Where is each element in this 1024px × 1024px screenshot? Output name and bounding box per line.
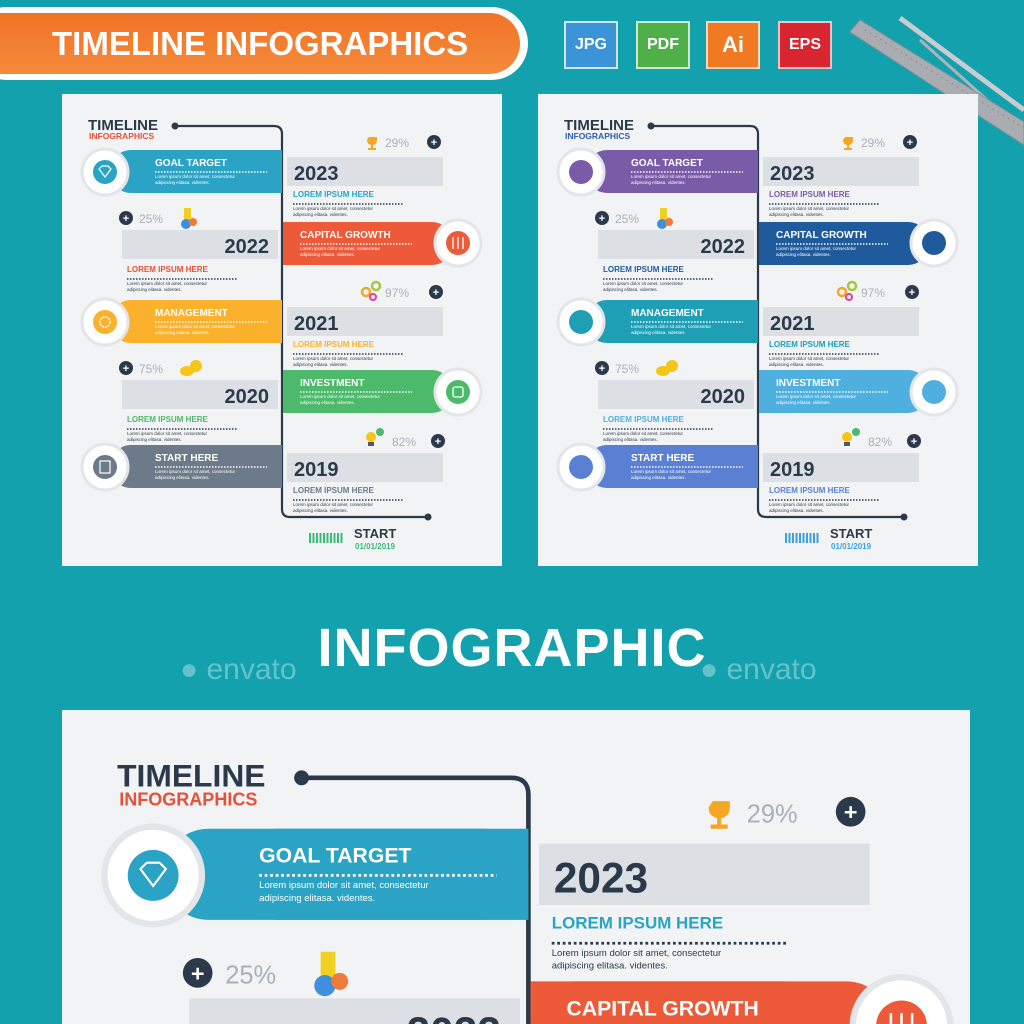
- band: investment: INVESTMENT: [300, 378, 364, 389]
- year 2020: [598, 380, 754, 442]
- year 2021: [287, 307, 443, 367]
- stat 25%: 25%: [139, 212, 163, 226]
- year 2023: 2023: [294, 163, 338, 185]
- stat 25%: 25%: [615, 212, 639, 226]
- year 2023: [287, 157, 443, 217]
- stat 97%: 97%: [861, 286, 885, 300]
- year 2023: adipiscing elitasa. videntes.: [293, 212, 348, 217]
- band: management: Lorem ipsum dolor sit amet, consectetur: [155, 324, 236, 329]
- year 2022: adipiscing elitasa. videntes.: [603, 287, 658, 292]
- band: capital growth: [531, 977, 950, 1024]
- year 2023: LOREM IPSUM HERE: [293, 190, 375, 199]
- icon: EPS: [778, 21, 832, 69]
- icon: JPG: JPG: [575, 36, 607, 53]
- year 2020: 2020: [700, 386, 745, 408]
- band: start here: adipiscing elitasa. videntes.: [155, 475, 210, 480]
- year 2019: adipiscing elitasa. videntes.: [769, 508, 824, 513]
- year 2022: LOREM IPSUM HERE: [127, 265, 209, 274]
- icon: PDF: PDF: [647, 36, 679, 53]
- stat 29%: [843, 135, 917, 150]
- stat 82%: [366, 428, 445, 449]
- year 2021: [763, 307, 919, 367]
- icon: ruler and compass: [849, 16, 1024, 146]
- stat 29%: 29%: [385, 136, 409, 150]
- year 2021: LOREM IPSUM HERE: [769, 340, 851, 349]
- year 2023: LOREM IPSUM HERE: [552, 913, 723, 932]
- stat 75%: +: [599, 363, 605, 375]
- card 2: [538, 94, 978, 566]
- band: start here: Lorem ipsum dolor sit amet, consectetur: [155, 469, 236, 474]
- band: start here: START HERE: [155, 453, 218, 464]
- year 2021: 2021: [770, 313, 814, 335]
- year 2022: Lorem ipsum dolor sit amet, consectetur: [603, 281, 684, 286]
- year 2020: adipiscing elitasa. videntes.: [603, 437, 658, 442]
- year 2020: adipiscing elitasa. videntes.: [127, 437, 182, 442]
- year 2020: LOREM IPSUM HERE: [127, 415, 209, 424]
- header title: TIMELINE INFOGRAPHICS: [52, 25, 468, 62]
- band: investment: [759, 369, 957, 415]
- year 2019: 2019: [770, 459, 814, 481]
- start label: 01/01/2019: [831, 542, 872, 551]
- title: INFOGRAPHIC: INFOGRAPHIC: [318, 618, 706, 678]
- stat 97%: [838, 282, 919, 300]
- band: capital growth: [283, 220, 481, 266]
- band: goal target: Lorem ipsum dolor sit amet, consectetur: [259, 880, 430, 891]
- band: goal target: adipiscing elitasa. videntes.: [259, 893, 375, 904]
- band: capital growth: [759, 220, 957, 266]
- heading: TIMELINE: TIMELINE: [117, 757, 266, 793]
- band: management: [82, 299, 282, 345]
- band: capital growth: CAPITAL GROWTH: [776, 230, 867, 241]
- year 2021: LOREM IPSUM HERE: [293, 340, 375, 349]
- start label: START: [830, 526, 872, 541]
- stat 82%: 82%: [868, 435, 892, 449]
- year 2019: 2019: [294, 459, 338, 481]
- year 2021: Lorem ipsum dolor sit amet, consectetur: [769, 356, 850, 361]
- year 2022: [189, 998, 520, 1024]
- year 2023: adipiscing elitasa. videntes.: [552, 961, 668, 972]
- year 2019: LOREM IPSUM HERE: [769, 486, 851, 495]
- band: capital growth: CAPITAL GROWTH: [300, 230, 391, 241]
- icon: JPG: [564, 21, 618, 69]
- year 2023: adipiscing elitasa. videntes.: [769, 212, 824, 217]
- heading: TIMELINE: INFOGRAPHICS: [119, 789, 257, 809]
- header pill: [0, 7, 528, 80]
- start label: 01/01/2019: [355, 542, 396, 551]
- stat 29%: +: [907, 137, 913, 149]
- icon: PDF: [636, 21, 690, 69]
- stat 75%: 75%: [615, 362, 639, 376]
- band: investment: adipiscing elitasa. videntes.: [776, 400, 831, 405]
- year 2023: 2023: [770, 163, 814, 185]
- year 2020: Lorem ipsum dolor sit amet, consectetur: [127, 431, 208, 436]
- band: goal target: adipiscing elitasa. videntes.: [631, 180, 686, 185]
- stat 25%: [119, 208, 197, 229]
- stat 25%: [183, 952, 348, 996]
- year 2021: adipiscing elitasa. videntes.: [769, 362, 824, 367]
- stat 75%: [595, 360, 678, 376]
- band: goal target: [104, 827, 528, 924]
- year 2023: [763, 157, 919, 217]
- year 2022: [122, 230, 278, 292]
- band: goal target: [558, 149, 758, 195]
- band: capital growth: adipiscing elitasa. videntes.: [300, 252, 355, 257]
- start label: [309, 526, 396, 551]
- year 2021: adipiscing elitasa. videntes.: [293, 362, 348, 367]
- year 2022: 2022: [700, 236, 745, 258]
- stat 29%: +: [844, 799, 857, 825]
- year 2023: Lorem ipsum dolor sit amet, consectetur: [769, 206, 850, 211]
- band: management: MANAGEMENT: [155, 308, 228, 319]
- year 2020: [122, 380, 278, 442]
- timeline line: [294, 770, 528, 1024]
- stat 29%: 29%: [861, 136, 885, 150]
- band: investment: INVESTMENT: [776, 378, 840, 389]
- stat 25%: [595, 208, 673, 229]
- icon: Ai: Ai: [722, 32, 744, 57]
- year 2023: 2023: [554, 854, 648, 901]
- band: investment: adipiscing elitasa. videntes.: [300, 400, 355, 405]
- start label: [785, 526, 872, 551]
- year 2022: Lorem ipsum dolor sit amet, consectetur: [127, 281, 208, 286]
- band: investment: Lorem ipsum dolor sit amet, consectetur: [300, 394, 381, 399]
- year 2019: LOREM IPSUM HERE: [293, 486, 375, 495]
- stat 25%: 25%: [225, 961, 276, 989]
- heading: TIMELINE: TIMELINE: [564, 117, 634, 134]
- band: start here: [558, 444, 758, 490]
- stat 97%: 97%: [385, 286, 409, 300]
- stat 82%: [842, 428, 921, 449]
- year 2021: 2021: [294, 313, 338, 335]
- stat 97%: [362, 282, 443, 300]
- stat 82%: +: [435, 436, 441, 448]
- band: management: [558, 299, 758, 345]
- band: goal target: GOAL TARGET: [155, 158, 227, 169]
- year 2020: Lorem ipsum dolor sit amet, consectetur: [603, 431, 684, 436]
- band: start here: Lorem ipsum dolor sit amet, consectetur: [631, 469, 712, 474]
- band: capital growth: Lorem ipsum dolor sit amet, consectetur: [300, 246, 381, 251]
- card 1: [62, 94, 502, 566]
- stat 75%: +: [123, 363, 129, 375]
- year 2019: Lorem ipsum dolor sit amet, consectetur: [769, 502, 850, 507]
- band: management: adipiscing elitasa. videntes.: [155, 330, 210, 335]
- stat 29%: +: [431, 137, 437, 149]
- stat 82%: +: [911, 436, 917, 448]
- year 2022: [598, 230, 754, 292]
- timeline line: [648, 122, 908, 520]
- band: capital growth: adipiscing elitasa. videntes.: [776, 252, 831, 257]
- band: management: adipiscing elitasa. videntes.: [631, 330, 686, 335]
- band: management: MANAGEMENT: [631, 308, 704, 319]
- stat 29%: [367, 135, 441, 150]
- year 2021: Lorem ipsum dolor sit amet, consectetur: [293, 356, 374, 361]
- band: start here: START HERE: [631, 453, 694, 464]
- format icons: [564, 21, 832, 69]
- band: goal target: GOAL TARGET: [259, 845, 411, 868]
- year 2019: Lorem ipsum dolor sit amet, consectetur: [293, 502, 374, 507]
- band: start here: [82, 444, 282, 490]
- year 2020: 2020: [224, 386, 269, 408]
- band: capital growth: Lorem ipsum dolor sit amet, consectetur: [776, 246, 857, 251]
- stat 25%: +: [599, 213, 605, 225]
- year 2023: Lorem ipsum dolor sit amet, consectetur: [293, 206, 374, 211]
- icon: Ai: [706, 21, 760, 69]
- stat 29%: [709, 797, 865, 829]
- watermarks: [180, 653, 817, 686]
- band: start here: adipiscing elitasa. videntes.: [631, 475, 686, 480]
- band: investment: [283, 369, 481, 415]
- heading: TIMELINE: INFOGRAPHICS: [565, 131, 630, 141]
- header title: [0, 13, 520, 74]
- stat 29%: 29%: [747, 800, 798, 828]
- heading: TIMELINE: INFOGRAPHICS: [89, 131, 154, 141]
- stat 25%: +: [191, 960, 204, 986]
- watermarks: ● envato: [700, 653, 817, 686]
- band: goal target: [82, 149, 282, 195]
- stat 75%: [119, 360, 202, 376]
- panel: large card detail: [62, 710, 970, 1024]
- year 2020: LOREM IPSUM HERE: [603, 415, 685, 424]
- heading: TIMELINE: [117, 757, 266, 809]
- band: goal target: GOAL TARGET: [631, 158, 703, 169]
- year 2019: [287, 453, 443, 513]
- band: goal target: Lorem ipsum dolor sit amet, consectetur: [155, 174, 236, 179]
- band: investment: Lorem ipsum dolor sit amet, consectetur: [776, 394, 857, 399]
- stat 97%: +: [909, 287, 915, 299]
- stat 75%: 75%: [139, 362, 163, 376]
- band: goal target: Lorem ipsum dolor sit amet, consectetur: [631, 174, 712, 179]
- stat 97%: +: [433, 287, 439, 299]
- band: capital growth: CAPITAL GROWTH: [567, 997, 759, 1020]
- year 2023: Lorem ipsum dolor sit amet, consectetur: [552, 948, 722, 959]
- watermarks: ● envato: [180, 653, 297, 686]
- year 2022: LOREM IPSUM HERE: [603, 265, 685, 274]
- stat 25%: +: [123, 213, 129, 225]
- year 2019: [763, 453, 919, 513]
- stat 82%: 82%: [392, 435, 416, 449]
- year 2023: LOREM IPSUM HERE: [769, 190, 851, 199]
- band: management: Lorem ipsum dolor sit amet, consectetur: [631, 324, 712, 329]
- icon: EPS: EPS: [789, 36, 821, 53]
- year 2023: [539, 844, 870, 972]
- year 2019: adipiscing elitasa. videntes.: [293, 508, 348, 513]
- start label: START: [354, 526, 396, 541]
- timeline line: [172, 122, 432, 520]
- year 2022: 2022: [224, 236, 269, 258]
- heading: TIMELINE: TIMELINE: [88, 117, 158, 134]
- band: goal target: adipiscing elitasa. videntes.: [155, 180, 210, 185]
- year 2022: adipiscing elitasa. videntes.: [127, 287, 182, 292]
